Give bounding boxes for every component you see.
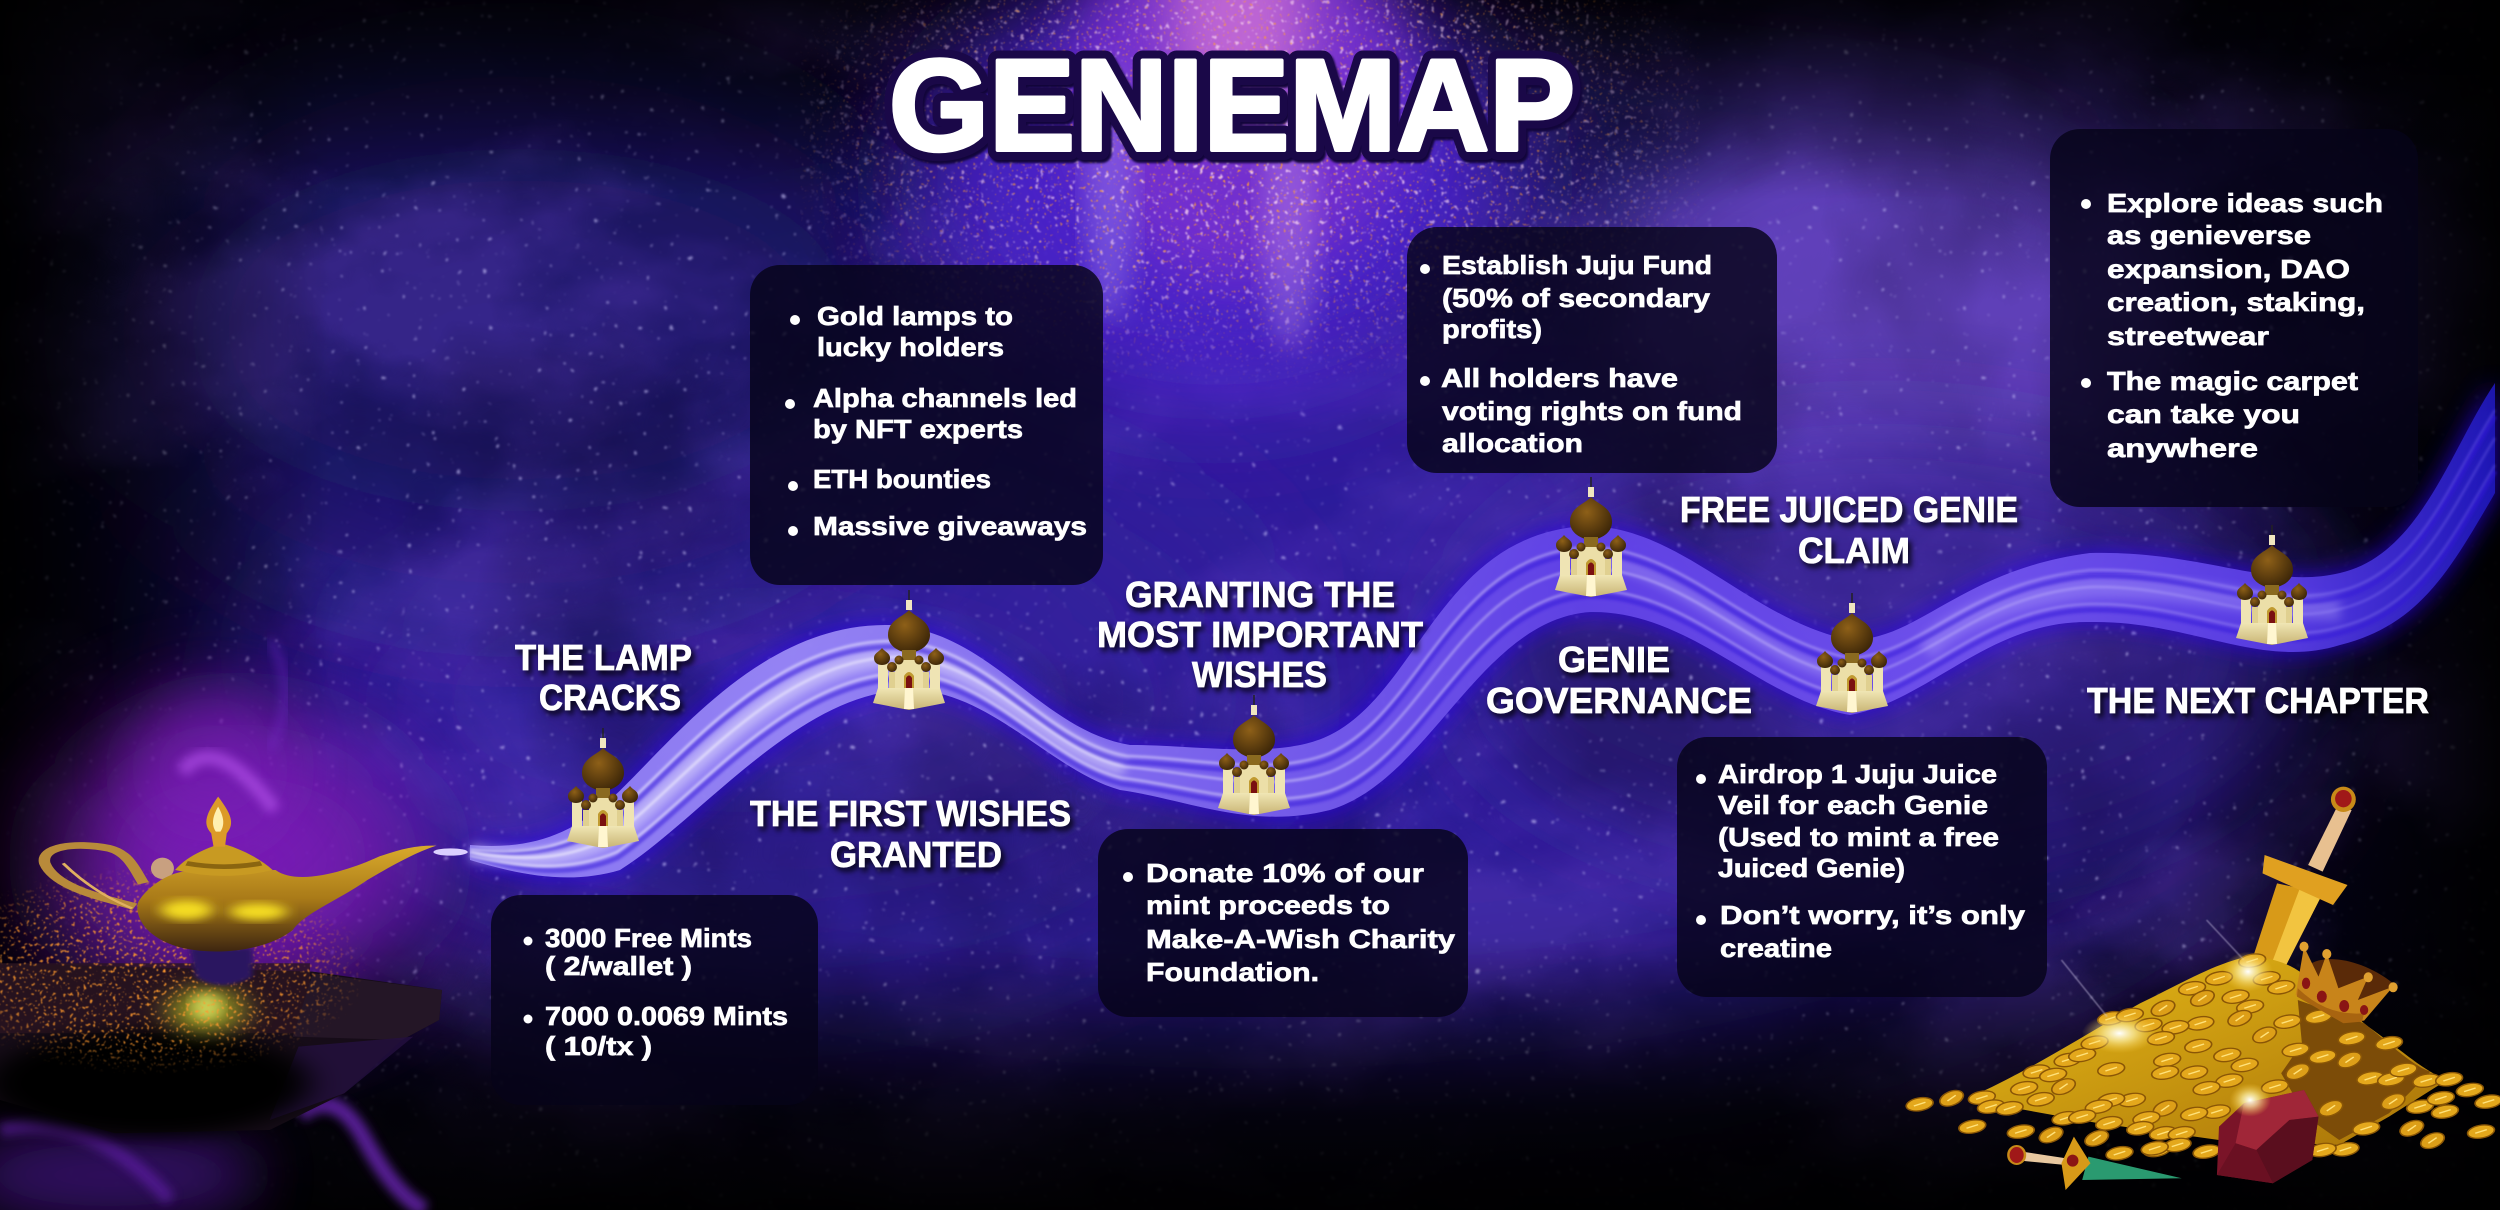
bullet list: Establish Juju Fund (1442, 250, 1712, 280)
bullet list (785, 301, 1087, 541)
bullet list (2081, 188, 2383, 463)
heading: granting the most important wishes: WISHES (1192, 654, 1327, 695)
panel: first wishes details (750, 265, 1103, 585)
bullet list: Foundation. (1146, 957, 1319, 987)
bullet list: mint proceeds to (1146, 890, 1390, 920)
illustration: floating rock (0, 963, 442, 1137)
bullet list: Explore ideas such (2107, 188, 2383, 218)
panel: donation details (1098, 829, 1468, 1017)
icon: palace 4 (1555, 477, 1627, 597)
heading: granting the most important wishes: GRANTING THE (1125, 574, 1395, 615)
heading: the first wishes granted: GRANTED (830, 834, 1002, 875)
bullet list: profits) (1442, 314, 1542, 344)
bullet list: ( 2/wallet ) (545, 951, 692, 981)
heading: the lamp cracks: THE LAMP (515, 637, 692, 678)
heading: the lamp cracks (515, 637, 692, 718)
bullet list: Don’t worry, it’s only (1720, 900, 2026, 930)
heading: genie governance: GOVERNANCE (1486, 680, 1752, 721)
bullet list: by NFT experts (813, 414, 1023, 444)
panel: the lamp cracks details (491, 895, 818, 1105)
heading: free juiced genie claim: FREE JUICED GENIE (1680, 489, 2018, 530)
panel: juju fund details (1407, 227, 1777, 473)
bullet list: can take you (2107, 399, 2300, 429)
icon: palace 1 (567, 728, 639, 848)
heading: the lamp cracks: CRACKS (539, 677, 681, 718)
heading: genie governance: GENIE (1558, 639, 1670, 680)
magic carpet ribbon path (470, 383, 2495, 877)
bullet list: Donate 10% of our (1146, 858, 1424, 888)
bullet list: Gold lamps to (817, 301, 1013, 331)
icon: ruby gem (2217, 1090, 2318, 1183)
bullet list: 7000 0.0069 Mints (545, 1001, 788, 1031)
bullet list: as genieverse (2107, 220, 2311, 250)
icon: sword (2254, 787, 2356, 967)
heading: granting the most important wishes: MOST IMPORTANT (1097, 614, 1423, 655)
bullet list: lucky holders (817, 332, 1004, 362)
icon: palace 5 (1816, 593, 1888, 713)
heading: the next chapter: THE NEXT CHAPTER (2087, 680, 2429, 721)
illustration: golden genie lamp (44, 797, 468, 985)
heading: the first wishes granted (750, 793, 1071, 875)
bullet list: voting rights on fund (1442, 396, 1742, 426)
bullet list: streetwear (2107, 321, 2269, 351)
title: GENIEMAP (889, 32, 1575, 178)
bullet list: creation, staking, (2107, 287, 2365, 317)
bullet list: All holders have (1441, 363, 1678, 393)
bullet list (1420, 250, 1742, 458)
bullet list (1123, 858, 1456, 987)
bullet list: (Used to mint a free (1718, 822, 1999, 852)
bullet list: Alpha channels led (813, 383, 1077, 413)
bullet list (524, 923, 788, 1061)
bullet list: allocation (1442, 428, 1583, 458)
panel: airdrop details (1677, 737, 2047, 997)
icon: palace 2 (873, 590, 945, 710)
heading: free juiced genie claim: CLAIM (1798, 530, 1910, 571)
heading: granting the most important wishes (1097, 574, 1423, 695)
bullet list: Make-A-Wish Charity (1146, 924, 1456, 954)
bullet list: Massive giveaways (813, 511, 1087, 541)
gold sparks on the rock (0, 870, 365, 1074)
icon: palace 6 (2236, 525, 2308, 645)
bullet list: expansion, DAO (2107, 254, 2350, 284)
heading: genie governance (1486, 639, 1752, 721)
bullet list: ( 10/tx ) (545, 1031, 652, 1061)
panel: next chapter details (2050, 129, 2418, 507)
icon: dagger (2008, 1137, 2182, 1190)
bullet list: creatine (1720, 933, 1832, 963)
purple smoke around the lamp (0, 640, 425, 1210)
title: GENIEMAP (889, 32, 1575, 178)
bullet list (1696, 759, 2026, 963)
bullet list: anywhere (2107, 433, 2258, 463)
heading: the first wishes granted: THE FIRST WISHES (750, 793, 1071, 834)
light beam behind the title (800, 0, 1700, 460)
bullet list: Veil for each Genie (1718, 790, 1988, 820)
bullet list: The magic carpet (2107, 366, 2358, 396)
bullet list: 3000 Free Mints (545, 923, 752, 953)
sparkles (2061, 920, 2273, 1117)
icon: crown (2296, 942, 2398, 1023)
icon: palace 3 (1218, 695, 1290, 815)
bullet list: (50% of secondary (1442, 283, 1711, 313)
bullet list: Juiced Genie) (1718, 853, 1905, 883)
heading: free juiced genie claim (1680, 489, 2018, 571)
coins (1904, 952, 2500, 1162)
bullet list: ETH bounties (813, 464, 991, 494)
illustration: treasure pile (1904, 787, 2500, 1190)
bullet list: Airdrop 1 Juju Juice (1718, 759, 1997, 789)
